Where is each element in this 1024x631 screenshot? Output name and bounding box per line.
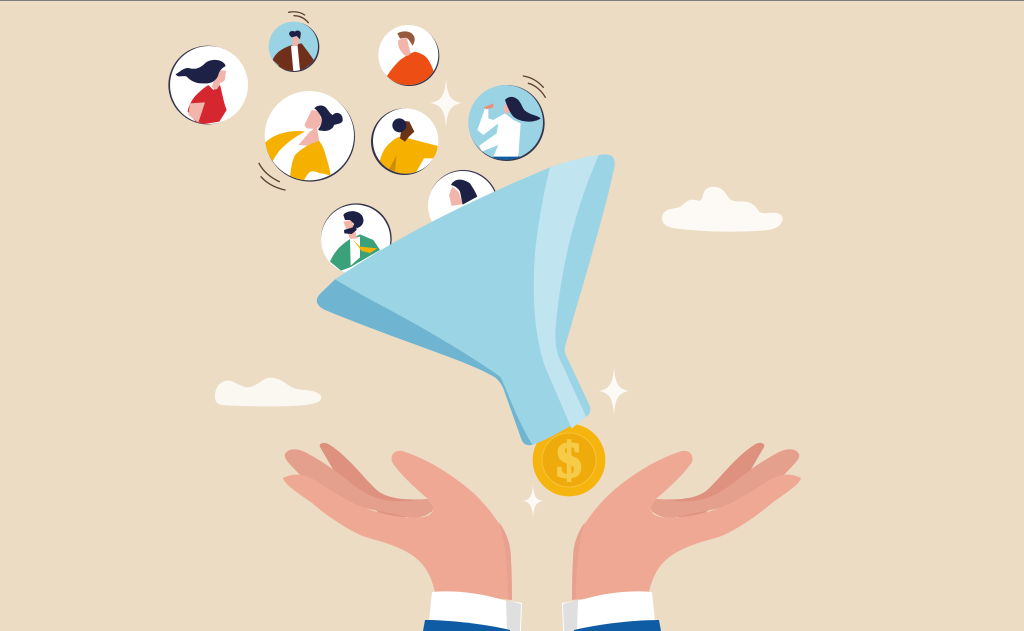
person: man in yellow: [371, 108, 438, 175]
cloud left: [216, 378, 321, 406]
sparkle near people: [430, 79, 462, 127]
coin: [533, 424, 605, 496]
left hand: [283, 443, 522, 631]
sparkle near coin: [523, 485, 543, 517]
funnel highlight: [534, 155, 599, 429]
people in circles: [168, 12, 545, 274]
person: woman partly in funnel: [428, 170, 496, 222]
dollar sign: $: [556, 433, 582, 489]
person: bearded man in green: [321, 203, 392, 274]
top edge line: [0, 0, 1024, 1]
person: woman in red: [168, 46, 248, 125]
motion lines: [259, 12, 545, 190]
person: man in orange: [378, 25, 439, 86]
cloud right: [663, 188, 782, 231]
person: woman in white: [468, 85, 545, 164]
right hand: [562, 443, 801, 631]
funnel shadow side: [317, 279, 532, 445]
person: man in brown jacket: [269, 22, 319, 73]
person: woman in yellow: [263, 91, 355, 182]
sparkle near funnel: [599, 367, 629, 415]
funnel body: [317, 154, 615, 445]
funnel: [317, 154, 615, 445]
